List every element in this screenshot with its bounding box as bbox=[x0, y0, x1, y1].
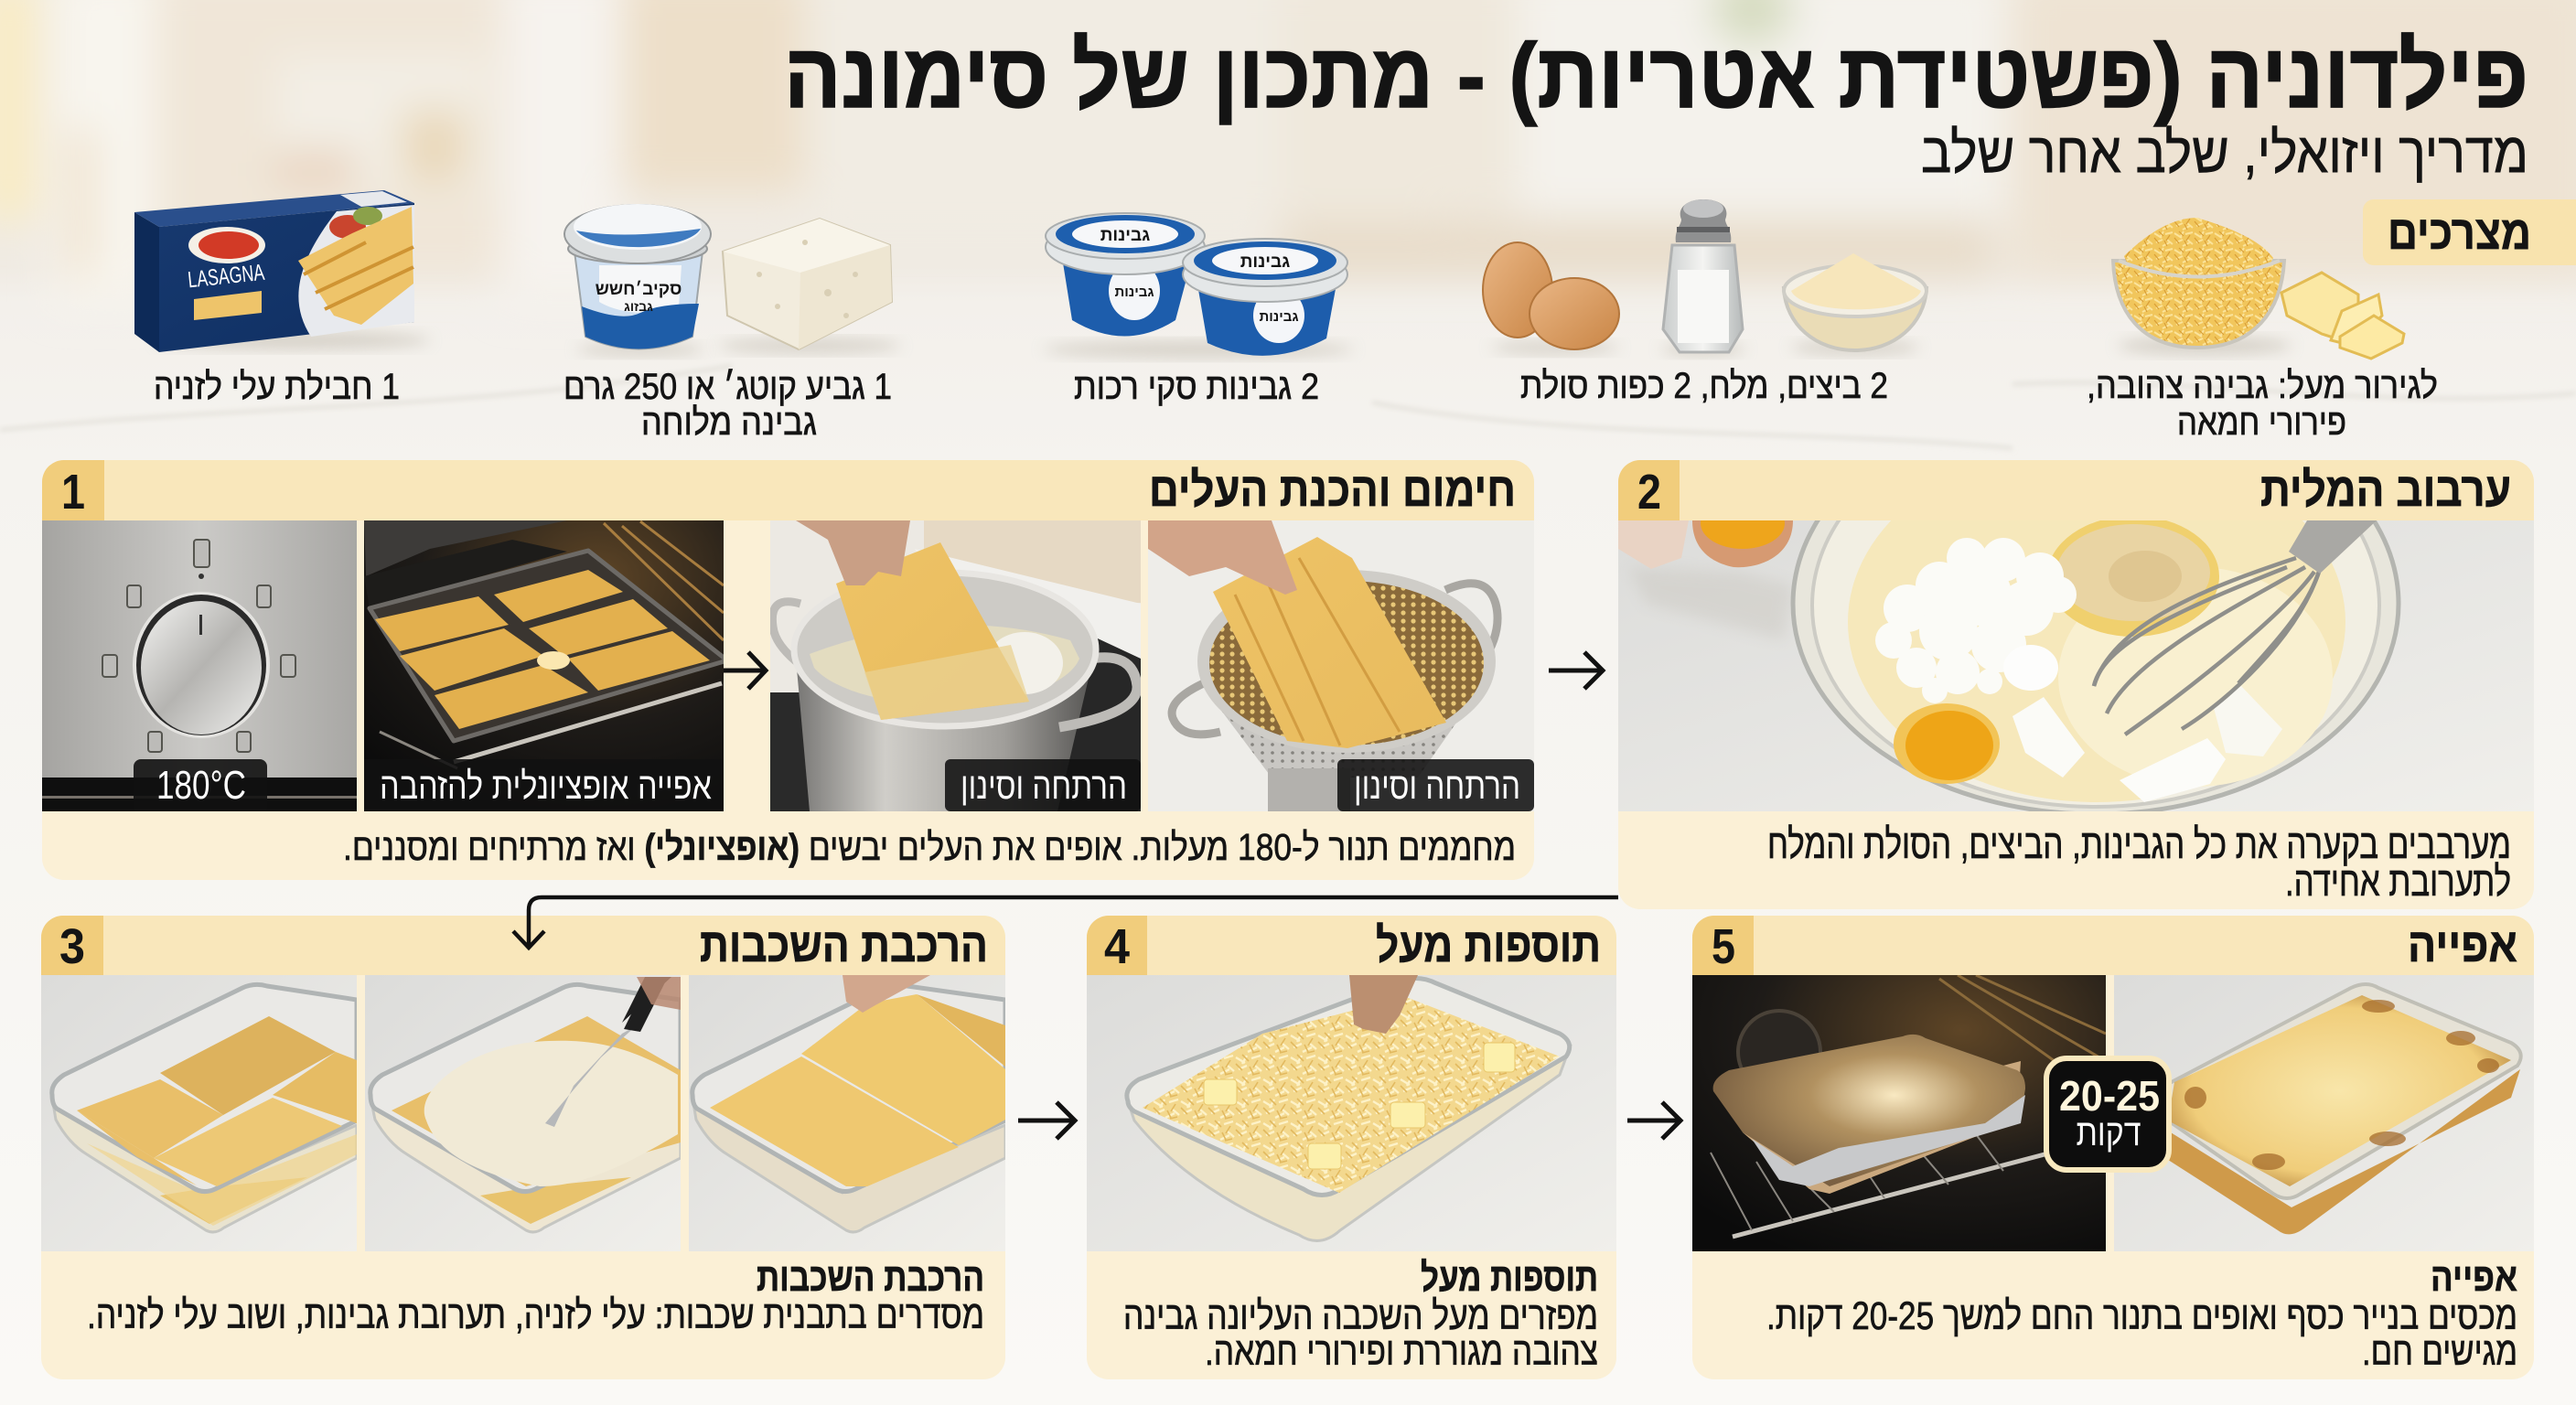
panel: step 5 bbox=[1692, 916, 2534, 1379]
text: step 1 description: מחממים תנור ל-180 מעלות. אופים את העלים יבשים (אופציונלי) ואז מרתיחים ומסננים. bbox=[343, 826, 1516, 868]
badge: step number 4: 4 bbox=[1104, 919, 1130, 974]
ingredient: cottage cheese tub: סקיב׳חשש bbox=[596, 280, 682, 299]
callout: baking time bbox=[2046, 1058, 2169, 1170]
ingredient: soft cheese tubs: גבינות bbox=[1114, 284, 1154, 300]
text: step 4 description: צהובה מגוררת ופירורי חמאה. bbox=[1205, 1330, 1598, 1374]
arrow: step 2 to step 3 connector bbox=[513, 897, 1618, 948]
ingredient: salt shaker bbox=[1661, 199, 1745, 356]
arrow: step 3 to step 4 bbox=[1018, 1102, 1075, 1139]
badge: step number 4 bbox=[1087, 916, 1147, 975]
ingredient: salted cheese block bbox=[718, 219, 901, 353]
ingredient: soft cheese tubs: גבינות bbox=[1240, 252, 1290, 272]
ingredient: eggs bbox=[1483, 242, 1619, 354]
text: step 5 description: אפייה bbox=[2431, 1256, 2517, 1300]
badge: step number 1: 1 bbox=[61, 465, 85, 520]
label: boil and drain: הרתחה וסינון bbox=[961, 765, 1127, 807]
badge: step number 2 bbox=[1618, 460, 1680, 520]
badge: step number 1 bbox=[42, 460, 104, 520]
panel: step 4 bbox=[1087, 916, 1616, 1379]
text: step 3 description: הרכבת השכבות bbox=[757, 1256, 984, 1300]
text: step 4 description bbox=[1123, 1256, 1598, 1374]
heading: step 1: חימום והכנת העלים bbox=[1149, 464, 1516, 517]
badge: step number 5 bbox=[1692, 916, 1754, 975]
label: temperature: 180°C bbox=[156, 763, 246, 808]
text: step 4 description: מפזרים מעל השכבה העליונה גבינה bbox=[1123, 1294, 1598, 1338]
arrow: step 4 to step 5 bbox=[1627, 1102, 1680, 1139]
badge: step number 2: 2 bbox=[1637, 465, 1661, 520]
ingredients tab bbox=[2363, 199, 2576, 265]
label: cottage cheese: 1 גביע קוטג׳ או 250 גרם bbox=[564, 367, 892, 407]
text: step 2 description bbox=[1767, 820, 2511, 905]
label: cottage cheese: גבינה מלוחה bbox=[641, 402, 817, 443]
ingredient: semolina bowl bbox=[1784, 253, 1927, 355]
panel: step 2 bbox=[1618, 393, 2534, 909]
photo: colander bbox=[1148, 520, 1534, 811]
ingredients tab: מצרכים bbox=[2388, 207, 2531, 260]
callout: baking time: דקות bbox=[2077, 1111, 2141, 1153]
badge: step number 3: 3 bbox=[59, 919, 85, 974]
text: step 5 description bbox=[1766, 1256, 2517, 1374]
badge: step number 3 bbox=[41, 916, 103, 975]
heading: step 4: תוספות מעל bbox=[1376, 919, 1601, 972]
ingredient: soft cheese tubs: גבינות bbox=[1259, 309, 1299, 325]
label: soft cheese: 2 גבינות סקי רכות bbox=[1074, 367, 1319, 407]
photo: foil covered dish in oven bbox=[1692, 975, 2106, 1251]
ingredient: cottage cheese tub bbox=[564, 204, 711, 356]
label: topping ingredients: פירורי חמאה bbox=[2177, 402, 2346, 443]
photo: top lasagna layer bbox=[689, 975, 1005, 1251]
photo: spreading cheese mixture bbox=[365, 975, 681, 1251]
photo: baked lasagna bbox=[2114, 975, 2534, 1251]
arrow: inside step 1 bbox=[724, 652, 766, 689]
callout: baking time: 20-25 bbox=[2059, 1072, 2160, 1120]
photo: oven dial bbox=[42, 520, 357, 814]
arrow: step 1 to step 2 bbox=[1549, 652, 1603, 689]
ingredient: lasagna box bbox=[134, 190, 430, 352]
heading: step 5: אפייה bbox=[2408, 919, 2517, 972]
ingredient: grated cheese and butter bbox=[2113, 218, 2404, 359]
label: optional baking: אפייה אופציונלית להזהבה bbox=[380, 765, 712, 807]
photo: sheets in oven bbox=[364, 520, 727, 811]
photo: boiling pot bbox=[770, 520, 1141, 811]
photo: cheese topping bbox=[1087, 975, 1616, 1251]
panel: step 3 bbox=[41, 916, 1005, 1379]
ingredient: lasagna box: LASAGNA bbox=[187, 260, 266, 293]
label: boil and drain: הרתחה וסינון bbox=[1354, 765, 1520, 807]
text: step 4 description: תוספות מעל bbox=[1421, 1256, 1598, 1300]
heading: step 3: הרכבת השכבות bbox=[700, 919, 988, 972]
label: eggs salt semolina: 2 ביצים, מלח, 2 כפות סולת bbox=[1520, 366, 1888, 406]
label: cottage cheese bbox=[564, 367, 892, 443]
ingredient: soft cheese tubs bbox=[1043, 213, 1354, 358]
text: step 3 description bbox=[87, 1256, 984, 1337]
ingredient: soft cheese tubs: גבינות bbox=[1100, 226, 1150, 245]
text: step 3 description: מסדרים בתבנית שכבות: עלי לזניה, תערובת גבינות, ושוב עלי לזניה. bbox=[87, 1293, 984, 1337]
ingredient: cottage cheese tub: גבזוג bbox=[624, 299, 653, 314]
badge: step number 5: 5 bbox=[1712, 919, 1735, 974]
photo: mixing bowl bbox=[1618, 520, 2534, 811]
photo: first lasagna layer bbox=[41, 975, 357, 1251]
label: topping ingredients: לגירור מעל: גבינה צהובה, bbox=[2087, 366, 2438, 406]
panel: step 1 bbox=[42, 460, 1534, 880]
text: step 5 description: מגישים חם. bbox=[2362, 1330, 2517, 1374]
label: topping ingredients bbox=[2087, 366, 2438, 443]
text: step 2 description: לתערובת אחידה. bbox=[2285, 858, 2511, 905]
label: lasagna package: 1 חבילת עלי לזניה bbox=[154, 367, 400, 407]
heading: step 2: ערבוב המלית bbox=[2260, 464, 2511, 517]
